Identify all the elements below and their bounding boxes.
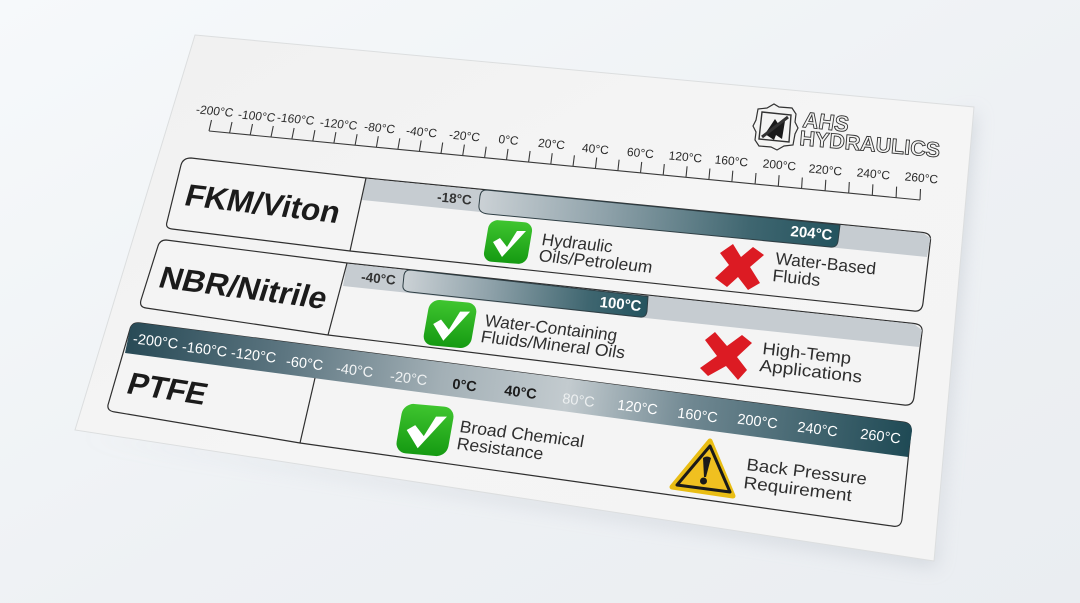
icon: check xyxy=(395,403,455,457)
incompatible text: Applications xyxy=(759,356,863,387)
logo wordmark xyxy=(799,107,941,162)
title: NBR/Nitrile xyxy=(155,260,332,316)
band labels: -60°C xyxy=(285,354,324,374)
max temp: 204°C xyxy=(790,223,833,244)
scale axis and ticks xyxy=(209,120,920,200)
band labels: 80°C xyxy=(561,391,596,411)
incompatible text xyxy=(772,249,877,290)
scale labels: -40°C xyxy=(405,124,438,140)
logo emblem xyxy=(753,104,798,150)
panel outline xyxy=(167,158,931,311)
scale labels: 0°C xyxy=(498,132,520,148)
max temp: 100°C xyxy=(599,294,642,315)
incompatible text: Water-Based xyxy=(775,249,877,279)
scale labels: -160°C xyxy=(276,110,316,128)
scale labels: -80°C xyxy=(363,120,396,136)
temperature scale band xyxy=(125,323,912,457)
compatible text xyxy=(479,311,627,362)
band labels: 120°C xyxy=(616,398,659,418)
scale labels: 20°C xyxy=(537,136,566,152)
band labels: -160°C xyxy=(181,339,228,361)
band labels: 200°C xyxy=(736,412,779,432)
scale labels: -100°C xyxy=(237,107,277,125)
band labels: -20°C xyxy=(389,369,428,389)
compatible text: Broad Chemical xyxy=(458,417,586,451)
compatible text: Oils/Petroleum xyxy=(537,246,654,277)
icon: red cross xyxy=(715,244,764,290)
panel outline xyxy=(108,323,911,526)
scale labels: 60°C xyxy=(626,145,655,161)
panel: PTFE xyxy=(108,323,912,526)
min temp: -18°C xyxy=(436,189,473,208)
range bar xyxy=(479,190,840,247)
incompatible text: High-Temp xyxy=(762,339,852,368)
scale labels: 240°C xyxy=(856,165,891,183)
logo wordmark: AHS xyxy=(801,107,851,137)
incompatible text: Fluids xyxy=(772,266,821,290)
panel outline xyxy=(141,240,922,405)
warning text: Back Pressure xyxy=(746,455,868,489)
compatible text: Water-Containing xyxy=(483,311,619,345)
band labels: 240°C xyxy=(796,420,839,440)
warning text xyxy=(743,455,868,505)
compatible text: Resistance xyxy=(455,434,545,464)
band labels: -120°C xyxy=(230,345,277,367)
warning text: Requirement xyxy=(743,473,853,505)
title: FKM/Viton xyxy=(181,178,345,230)
icon: red cross xyxy=(700,332,752,380)
scale labels xyxy=(195,102,939,187)
scale labels: 120°C xyxy=(668,148,703,166)
band labels: -200°C xyxy=(132,331,179,353)
temperature band xyxy=(362,179,930,257)
logo wordmark: HYDRAULICS xyxy=(799,127,941,162)
scale labels: -20°C xyxy=(448,128,481,144)
scale labels: 160°C xyxy=(714,152,749,170)
scale labels: 220°C xyxy=(808,161,843,179)
panel: FKM/Viton xyxy=(167,158,931,311)
divider xyxy=(300,378,315,443)
card shadow xyxy=(80,112,976,567)
scale labels: -200°C xyxy=(195,102,235,120)
icon: check xyxy=(422,299,478,349)
divider xyxy=(328,263,347,335)
scale labels: 200°C xyxy=(762,156,797,174)
band labels: 260°C xyxy=(859,427,902,447)
compatible text: Fluids/Mineral Oils xyxy=(479,327,627,362)
band labels xyxy=(132,331,902,447)
scale labels: -120°C xyxy=(319,115,359,133)
logo: AHS Hydraulics xyxy=(753,104,941,162)
compatible text: Hydraulic xyxy=(540,230,615,256)
card xyxy=(75,35,974,561)
title: PTFE xyxy=(123,366,212,411)
compatible text xyxy=(537,230,654,277)
icon: warning triangle xyxy=(672,441,733,496)
incompatible text xyxy=(759,339,863,387)
scale labels: 40°C xyxy=(581,141,610,157)
band labels: 160°C xyxy=(676,406,719,426)
panel: NBR/Nitrile xyxy=(141,240,922,405)
temperature scale xyxy=(195,102,939,200)
divider xyxy=(350,178,366,251)
range bar xyxy=(403,270,648,317)
scale labels: 260°C xyxy=(904,169,939,187)
band labels: 0°C xyxy=(451,377,478,396)
icon: check xyxy=(483,219,533,265)
band labels: -40°C xyxy=(335,361,374,381)
temperature band xyxy=(343,264,922,347)
min temp: -40°C xyxy=(360,269,397,288)
compatible text xyxy=(455,417,586,464)
band labels: 40°C xyxy=(503,383,538,403)
